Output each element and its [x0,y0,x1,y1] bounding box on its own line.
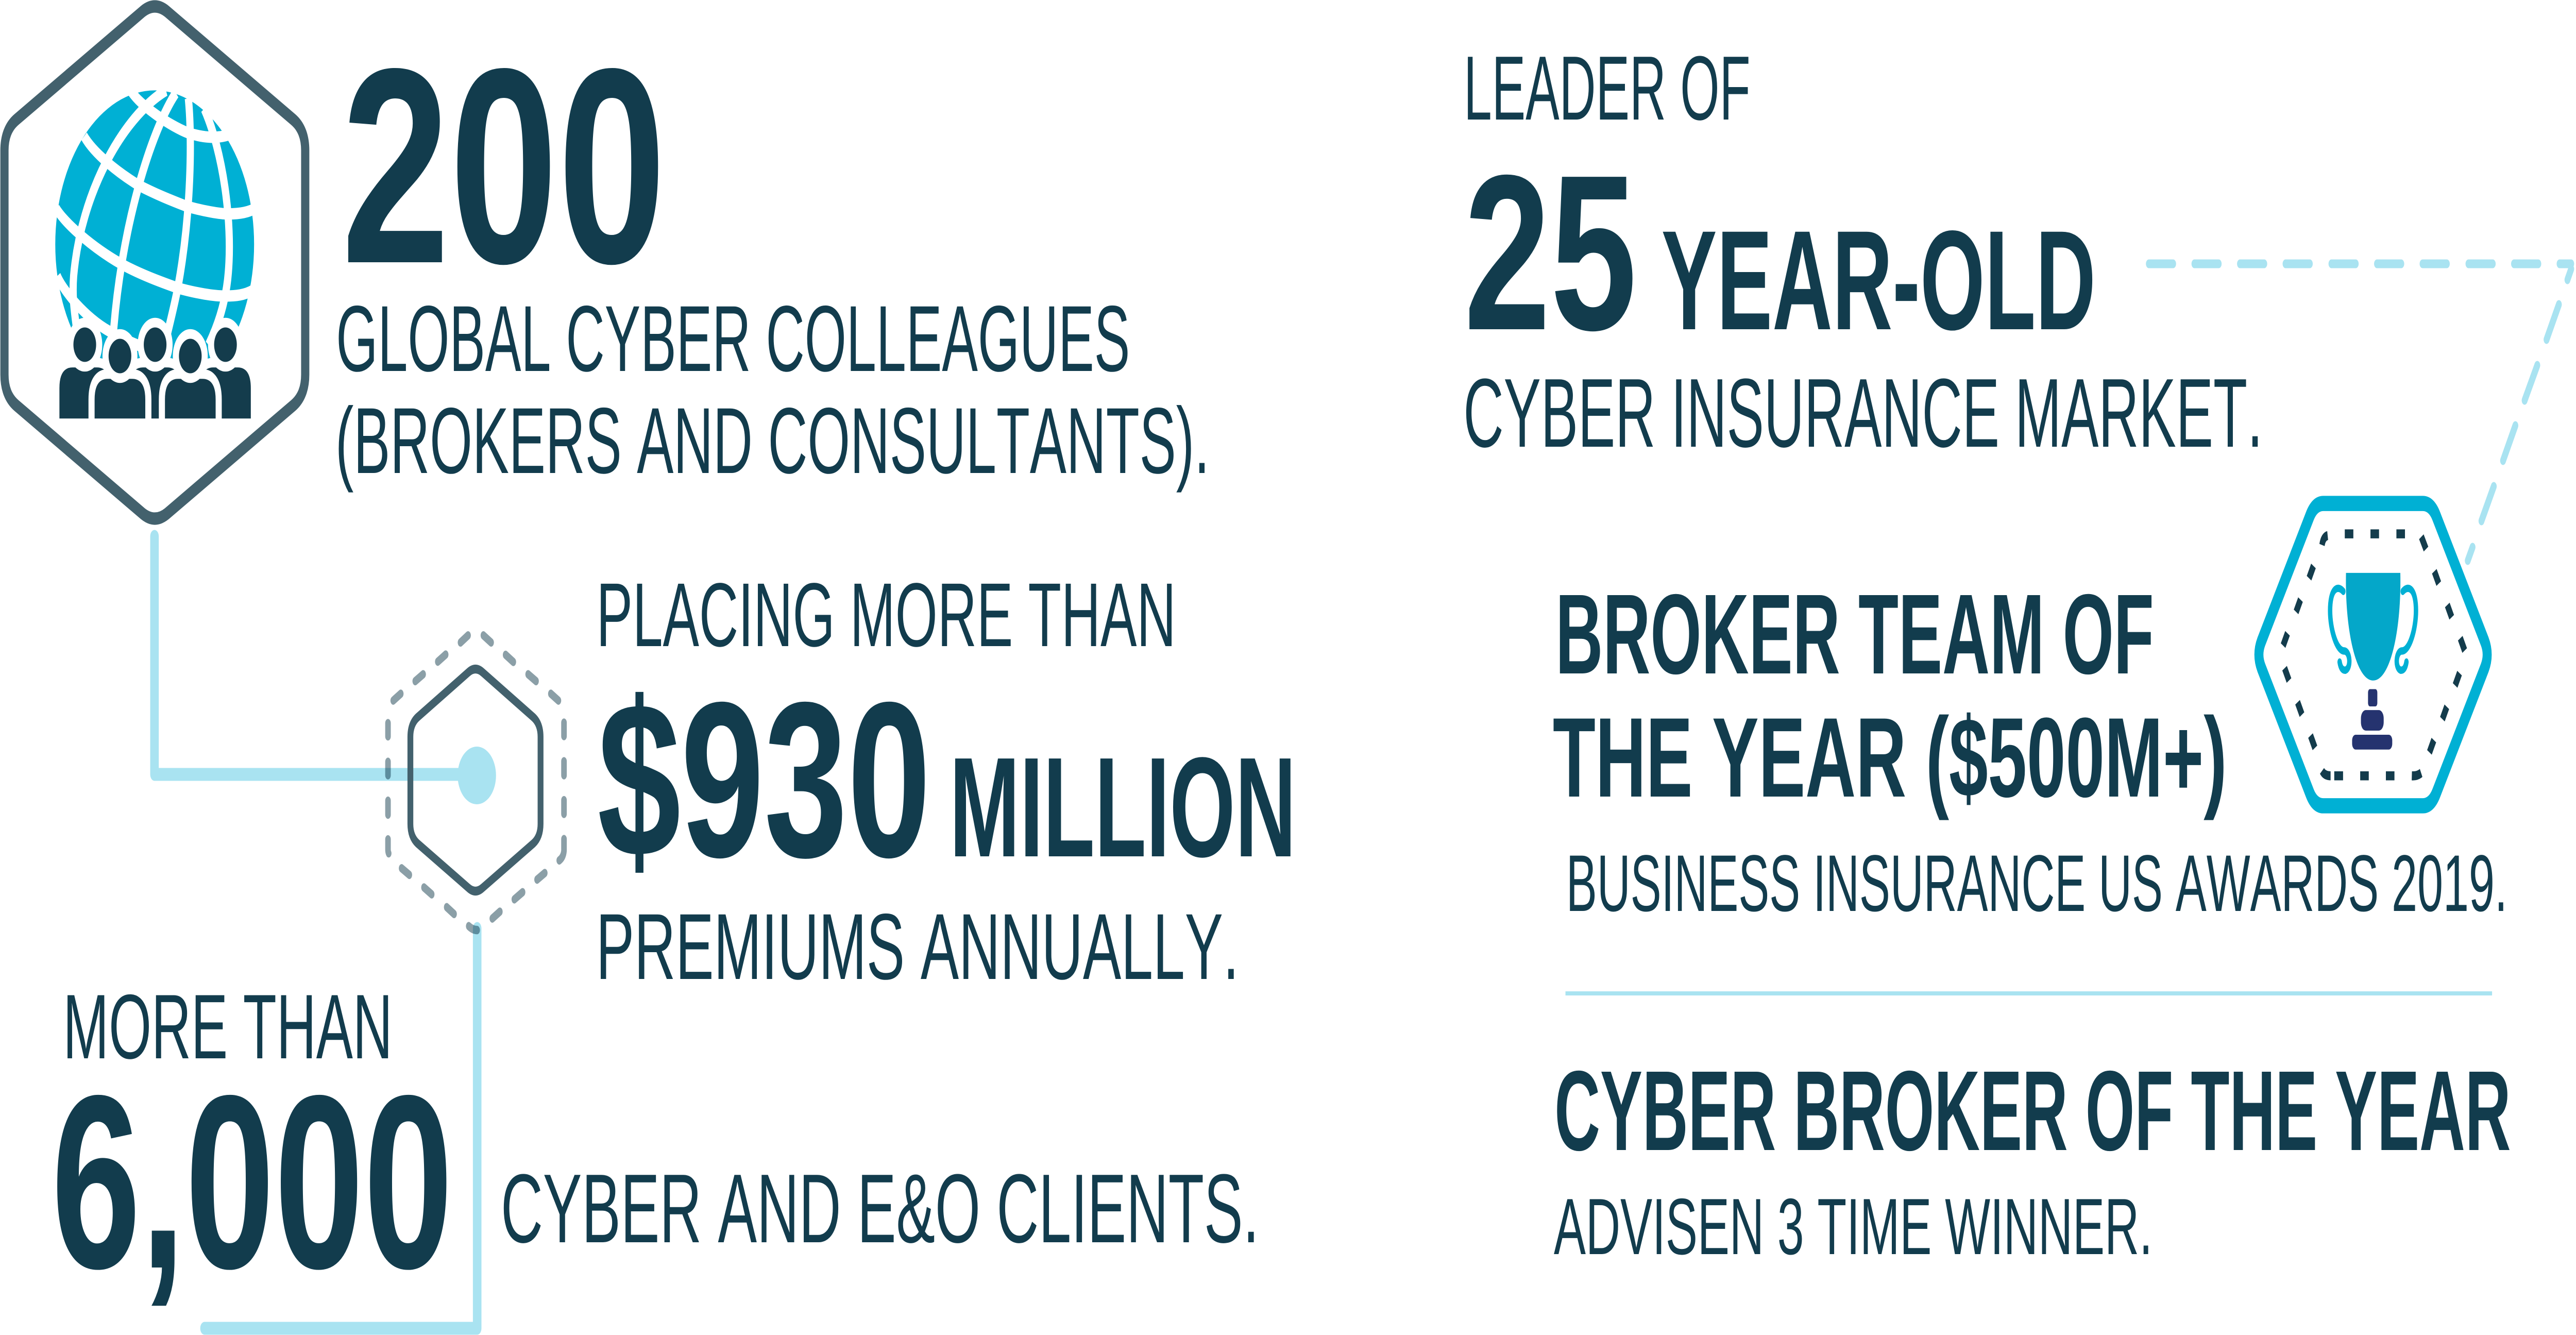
text: brokers and consultants: (BROKERS AND CONSULTANTS). [335,388,1210,493]
connector: big hexagon to small hexagon [155,536,477,774]
hexagon outline [5,6,305,518]
text: more than: MORE THAN [63,976,393,1078]
heading: the year ($500M+): THE YEAR ($500M+) [1553,694,2227,821]
icon: globe with people in hexagon [5,6,305,518]
stat unit: million: MILLION [950,729,1296,887]
text: leader of: LEADER OF [1464,37,1751,139]
connector: small hexagon to clients [205,928,477,1328]
stat: 6,000: 6,000 [52,1044,453,1320]
dashed hexagon [388,635,564,930]
badge outline [2259,503,2487,806]
heading: cyber broker of the year: CYBER BROKER OF THE YEAR [1554,1047,2511,1174]
globe and people [53,90,258,418]
node dot [457,747,496,804]
icon: trophy badge [2259,503,2487,806]
trophy base [2352,689,2392,750]
text: placing more than: PLACING MORE THAN [597,564,1176,666]
stat: $930: $930 [598,656,931,903]
text: global cyber colleagues: GLOBAL CYBER COLLEAGUES [336,287,1130,391]
trophy cup [2346,573,2400,681]
dashed connector: market to trophy badge [2149,264,2571,561]
text: advisen winner: ADVISEN 3 TIME WINNER. [1554,1182,2153,1272]
solid hexagon [411,669,540,891]
text: premiums annually: PREMIUMS ANNUALLY. [596,894,1239,999]
heading: broker team of: BROKER TEAM OF [1555,571,2154,698]
text: business insurance awards: BUSINESS INSURANCE US AWARDS 2019. [1566,838,2507,928]
dashed inner border [2283,534,2465,776]
stat: 25: 25 [1464,129,1637,376]
stat: 200: 200 [342,10,666,322]
icon: small hexagon node [388,635,564,930]
stat unit: year-old: YEAR-OLD [1662,201,2096,360]
trophy handles [2330,588,2416,670]
text: cyber and E&O clients: CYBER AND E&O CLIENTS. [501,1154,1259,1263]
text: cyber insurance market: CYBER INSURANCE MARKET. [1463,358,2263,468]
